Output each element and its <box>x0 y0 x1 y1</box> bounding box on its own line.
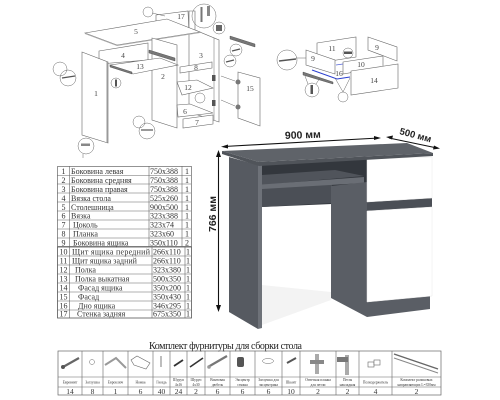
dimension: width 900 mm: 900 мм <box>285 129 321 142</box>
table rows: 11 <box>60 256 67 266</box>
icon: nail <box>160 356 162 367</box>
panel 4 rail beam <box>99 43 148 64</box>
hardware labels: для петли <box>311 383 326 387</box>
lower beam <box>262 184 332 207</box>
drawer bottom 16 blue outline: 16 <box>335 69 343 78</box>
table rows <box>60 167 190 318</box>
table rows: 350x110 <box>150 238 178 248</box>
hardware labels: Винтовая <box>210 378 225 382</box>
icon: eccentric coupling <box>237 357 244 367</box>
icon: minifix bolt <box>207 356 227 369</box>
side slide rail <box>230 36 255 47</box>
hardware quantities: 2 <box>194 387 198 396</box>
panel 3 right side: 3 <box>199 51 203 60</box>
hardware quantities: 1 <box>114 387 118 396</box>
table rows: 1 <box>186 266 190 274</box>
dimension: height 766 mm: 766 мм <box>207 196 219 232</box>
keyboard shelf <box>262 170 364 189</box>
panel 12 shelf: 12 <box>184 83 192 92</box>
table rows: 350x200 <box>153 284 181 292</box>
table rows: 6 <box>62 212 66 220</box>
hardware labels: Заглушка для <box>258 378 279 382</box>
exploded assembly diagram: drawer <box>277 37 398 102</box>
hardware quantities: 4 <box>374 387 378 396</box>
table rows: 900x500 <box>150 203 178 212</box>
hardware quantities: 14 <box>66 387 74 396</box>
hardware table <box>58 351 441 396</box>
table rows: 7 <box>62 220 66 230</box>
hardware quantities: 8 <box>91 387 95 396</box>
table rows: 266x110 <box>153 248 181 256</box>
table rows: 13 <box>60 274 68 284</box>
tabletop <box>222 143 433 166</box>
icon: foot <box>131 356 150 369</box>
table rows: 750x388 <box>150 167 178 176</box>
panel 12 shelf <box>177 80 213 95</box>
table rows: Фасад ящика <box>78 284 123 292</box>
hardware labels: Полкодержатель <box>363 380 388 384</box>
table rows: 1 <box>186 248 190 256</box>
table rows: Цоколь <box>73 220 98 230</box>
icon: screw 4x16 <box>174 360 183 366</box>
hardware quantities: 6 <box>241 387 245 396</box>
table rows: 525x260 <box>150 194 178 203</box>
hardware quantities: 2 <box>346 387 350 396</box>
panel 8 strip: 8 <box>194 63 198 72</box>
drawer slide on panel 2 <box>149 50 175 61</box>
panel 6 base <box>177 104 213 117</box>
table rows: 1 <box>185 230 189 238</box>
plinth <box>367 296 430 317</box>
panel 2 middle side: 2 <box>161 72 165 81</box>
panel 5 tabletop: 5 <box>134 27 138 36</box>
hardware labels: Заглушка <box>85 380 100 384</box>
panel 2 middle side <box>152 38 177 128</box>
dimension: depth 500 mm: 500 мм <box>398 126 433 145</box>
table rows: 675x350 <box>153 310 181 318</box>
panel 1 left side: 1 <box>94 89 98 98</box>
hardware quantities: 6 <box>139 387 143 396</box>
hardware callout circles <box>53 4 242 158</box>
table rows: 750x388 <box>150 185 178 194</box>
hardware labels: Ответная планка <box>305 378 331 382</box>
icon: euro screw <box>61 358 79 369</box>
table rows: 15 <box>60 292 68 302</box>
drawer facade 14: 14 <box>370 76 378 85</box>
table rows: 1 <box>185 167 189 176</box>
table rows: Щит ящика задний <box>72 256 138 266</box>
hardware quantities: 10 <box>287 387 295 396</box>
table rows: Вязка стола <box>71 194 111 203</box>
left side panel <box>229 157 262 329</box>
hardware labels: Шуруп <box>173 378 184 382</box>
icon: roller guides <box>394 354 438 373</box>
panel 1 left side <box>82 52 108 143</box>
table rows: Дно ящика <box>78 302 116 310</box>
desk interior back <box>262 158 367 207</box>
table rows: Боковина правая <box>71 185 128 194</box>
table rows: 1 <box>186 302 190 310</box>
drawer slide <box>303 72 333 84</box>
table rows: 2 <box>185 238 189 248</box>
table rows: 9 <box>62 238 66 248</box>
table rows: 1 <box>186 310 190 318</box>
drawer callout circles <box>277 48 353 102</box>
icon: overlay hinge <box>337 355 349 375</box>
table rows: 1 <box>186 274 190 284</box>
drawer back panel 11: 11 <box>328 44 336 53</box>
table rows: 266x110 <box>153 256 181 266</box>
hardware labels: эксцентрика <box>259 383 278 387</box>
hardware labels: стяжка <box>237 383 248 387</box>
table rows: 346x295 <box>153 302 181 310</box>
hardware labels: 4x30 <box>192 383 200 387</box>
table rows: Столешница <box>71 203 114 212</box>
panel 4 rail beam: 4 <box>121 51 125 60</box>
hardware quantities: 2 <box>415 387 419 396</box>
panel 15 door: 15 <box>246 84 254 93</box>
middle panel <box>331 182 367 317</box>
hardware labels: накладная <box>340 383 356 387</box>
table rows: Стенка задняя <box>77 310 126 318</box>
cabinet strip <box>367 198 432 211</box>
panel 7 plinth <box>183 115 213 128</box>
hardware labels: Гвоздь <box>156 380 167 384</box>
hardware labels: Шуруп <box>191 378 202 382</box>
table rows: 1 <box>185 176 189 185</box>
table rows: Щит ящика передний <box>72 248 151 256</box>
table rows: 1 <box>62 167 66 176</box>
table rows: 2 <box>62 176 66 185</box>
panel 3 right side <box>189 11 219 122</box>
table rows: 1 <box>186 292 190 302</box>
icon: euro key <box>105 358 126 368</box>
hardware labels <box>63 378 436 387</box>
hardware labels: 4x16 <box>175 383 182 387</box>
hardware labels: Комплект роликовых <box>400 378 433 382</box>
table rows: 750x388 <box>150 176 178 185</box>
table rows: Боковина ящика <box>73 238 129 248</box>
exploded assembly diagram: desk <box>53 4 260 158</box>
table rows: 14 <box>60 284 68 292</box>
panel 13 pull-out shelf <box>110 58 178 74</box>
table rows: 500x350 <box>153 274 181 284</box>
hardware labels: дюбель <box>212 383 224 387</box>
table rows: 12 <box>60 266 68 274</box>
table rows: Боковина левая <box>71 167 124 176</box>
table rows: 323x388 <box>150 212 178 220</box>
drawer front <box>367 157 432 202</box>
dimension: width 900 mm <box>221 129 381 148</box>
table rows: 1 <box>185 220 189 230</box>
icon: shelf hinge plate <box>310 354 324 374</box>
panel 13 pull-out shelf: 13 <box>136 62 144 71</box>
panel 7 plinth: 7 <box>195 118 199 127</box>
table rows: 350x430 <box>153 292 181 302</box>
hardware quantities: 6 <box>216 387 220 396</box>
panel 15 door <box>238 72 260 126</box>
table rows: 16 <box>60 302 68 310</box>
shadow on floor <box>262 285 331 325</box>
parts table <box>57 166 192 318</box>
table rows: 1 <box>185 194 189 203</box>
hardware heading: Комплект фурнитуры для сборки стола <box>149 341 303 352</box>
drawer front panel 10: 10 <box>357 60 365 69</box>
table rows: Полка выкатная <box>75 274 130 284</box>
hardware labels: Петля <box>343 378 352 382</box>
icon: screw 4x30 <box>190 358 203 367</box>
door front <box>367 207 432 302</box>
icon: dowel <box>287 358 296 363</box>
icon: eccentric cap <box>262 358 274 364</box>
dimension: height 766 mm <box>207 150 221 312</box>
hardware labels: направляющих L=350мм <box>397 383 436 387</box>
desk product illustration <box>222 143 433 329</box>
table rows: 5 <box>62 203 66 212</box>
table rows: Вязка <box>71 212 91 220</box>
table rows: Планка <box>73 230 98 238</box>
panel 17 back: 17 <box>177 12 185 21</box>
table rows: 1 <box>186 284 190 292</box>
icon: cap <box>90 360 94 364</box>
icon: connector <box>368 360 380 367</box>
table rows: 323x74 <box>150 220 174 230</box>
hardware quantities: 2 <box>316 387 320 396</box>
panel 6 base: 6 <box>183 107 187 116</box>
hardware icons <box>61 354 438 375</box>
table rows: Боковина средняя <box>71 176 132 185</box>
hardware labels: Евровинт <box>63 380 78 384</box>
hardware labels: Евроключ <box>108 380 123 384</box>
table rows: 10 <box>60 248 68 256</box>
panel 5 tabletop <box>85 19 200 46</box>
panel 17 back <box>156 11 189 32</box>
dimension: depth 500 mm <box>386 126 440 150</box>
panel 8 strip <box>180 62 212 73</box>
table rows: 1 <box>186 256 190 266</box>
hardware labels: Ножка <box>135 380 146 384</box>
hardware quantities: 6 <box>267 387 271 396</box>
table rows: Фасад <box>78 292 99 302</box>
hardware labels: Шкант <box>286 380 297 384</box>
drawer side panel 9 right: 9 <box>375 43 379 52</box>
table rows: 323x380 <box>153 266 181 274</box>
table rows: 17 <box>60 310 68 318</box>
hardware labels: Эксцентр <box>235 378 250 382</box>
table rows: 1 <box>185 185 189 194</box>
table rows: 323x60 <box>150 230 174 238</box>
table rows: 1 <box>185 212 189 220</box>
table rows: 1 <box>185 203 189 212</box>
table rows: 8 <box>62 230 66 238</box>
table rows: 3 <box>62 185 66 194</box>
table rows: Полка <box>75 266 96 274</box>
hardware quantities: 40 <box>158 387 166 396</box>
table rows: 4 <box>62 194 66 203</box>
hardware quantities: 24 <box>175 387 182 396</box>
drawer side panel 9 left: 9 <box>311 54 315 63</box>
hardware quantities <box>66 387 419 396</box>
